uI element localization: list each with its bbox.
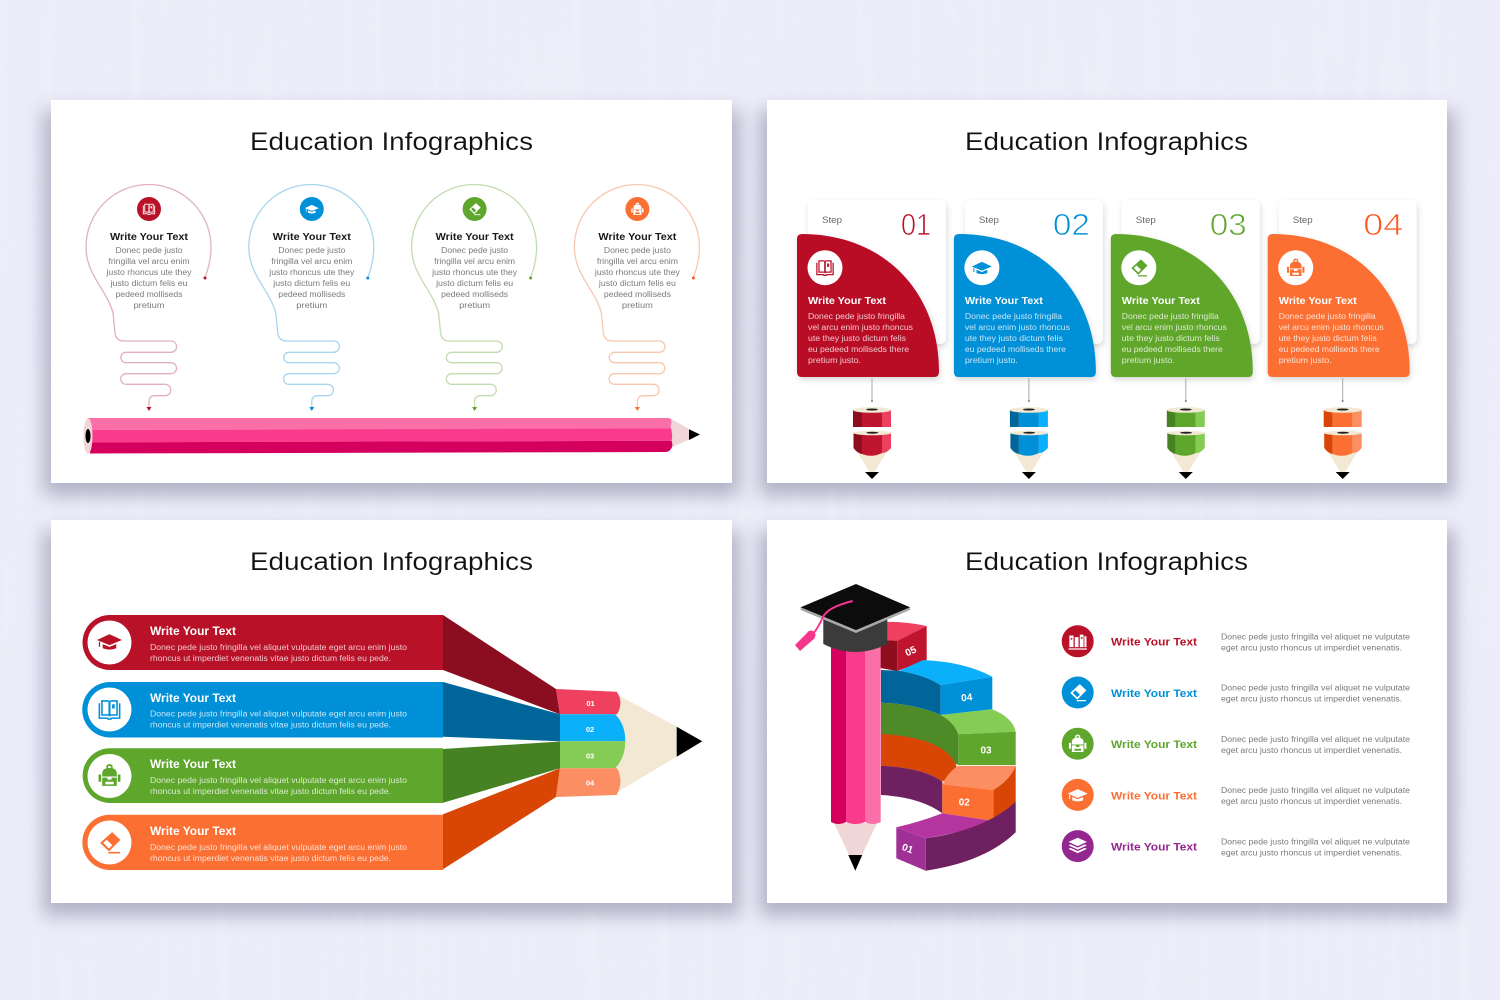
step card 03 [1111, 200, 1260, 377]
step 02: 02 [959, 798, 970, 808]
step card 01: Step [822, 215, 842, 226]
bar 3 green: Write Your Text [150, 759, 236, 771]
pencil tip with numbered segments: 04 [586, 778, 595, 787]
list item 5: Donec pede justo fringilla vel aliquet ne vulputate [1221, 837, 1411, 846]
list item 1 [1062, 625, 1411, 657]
panel: pencil bars slide [43, 520, 740, 916]
bulb 2 blue: Donec pede justo [278, 246, 346, 255]
list item 3 [1062, 728, 1411, 760]
pencil tip with numbered segments [556, 689, 702, 797]
list item 5: eget arcu justo rhoncus ut imperdiet venenatis. [1221, 848, 1402, 857]
bulb 4 orange: justo rhoncus ute they [594, 268, 680, 277]
bulb 3 green: fringilla vel arcu enim [434, 257, 515, 266]
list item 3: Donec pede justo fringilla vel aliquet ne vulputate [1221, 735, 1411, 744]
bar 4 orange: rhoncus ut imperdiet venenatis vitae justo dictum felis eu pede. [150, 854, 391, 863]
bulb 3 green: justo rhoncus ute they [431, 268, 517, 277]
bulb 4 orange [574, 185, 699, 411]
bar 1 red: Write Your Text [150, 626, 236, 638]
long pink pencil [84, 418, 700, 454]
panel: isometric steps slide [759, 520, 1455, 916]
bar 2 blue: rhoncus ut imperdiet venenatis vitae justo dictum felis eu pede. [150, 720, 391, 730]
list item 3: Write Your Text [1111, 739, 1197, 751]
purple back band [881, 766, 942, 813]
list item 4: Donec pede justo fringilla vel aliquet ne vulputate [1221, 786, 1411, 795]
step card 04 [1268, 200, 1417, 377]
bulb 2 blue: justo rhoncus ute they [268, 268, 354, 277]
panel: lightbulb pencil slide [43, 100, 740, 496]
list item 2: Write Your Text [1111, 688, 1197, 700]
bulb 1 red: pedeed molliseds [116, 290, 182, 299]
bulb 2 blue: pretium [296, 301, 328, 310]
bar 2 blue: Donec pede justo fringilla vel aliquet vulputate eget arcu enim justo [150, 710, 408, 718]
bulb 1 red: Write Your Text [110, 231, 189, 243]
bar 4 orange: Donec pede justo fringilla vel aliquet vulputate eget arcu enim justo [150, 843, 408, 852]
small pencil blue [1010, 378, 1048, 479]
step 03: 03 [980, 746, 992, 756]
step card 04: Donec pede justo fringilla [1279, 312, 1376, 321]
bulb 2 blue: Write Your Text [273, 231, 351, 243]
bulb 1 red: justo rhoncus ute they [105, 268, 192, 277]
bulb 4 orange: pedeed molliseds [604, 290, 671, 299]
step card 01: ute they justo dictum felis [808, 334, 906, 343]
step 05: 05 [904, 644, 919, 659]
step card 03: ute they justo dictum felis [1122, 334, 1220, 343]
step card 03: vel arcu enim justo rhoncus [1122, 323, 1227, 332]
step card 03: Step [1136, 215, 1156, 226]
list item 4: eget arcu justo rhoncus ut imperdiet venenatis. [1221, 797, 1402, 806]
bulb 3 green: Donec pede justo [441, 246, 509, 255]
step card 04: pretium justo. [1279, 356, 1332, 365]
list item 4: Write Your Text [1111, 790, 1197, 802]
step card 02: eu pedeed molliseds there [965, 345, 1066, 354]
list item 1: Write Your Text [1111, 637, 1197, 649]
bulb 4 orange: fringilla vel arcu enim [597, 257, 678, 266]
step 05 [880, 622, 927, 671]
bar 1 red: rhoncus ut imperdiet venenatis vitae justo dictum felis eu pede. [150, 654, 391, 663]
bar 2 blue [82, 682, 560, 741]
step card 04: ute they justo dictum felis [1279, 334, 1377, 343]
bar 4 orange: Write Your Text [150, 826, 236, 838]
bulb 3 green: Write Your Text [436, 231, 514, 243]
list item 2: eget arcu justo rhoncus ut imperdiet venenatis. [1221, 695, 1402, 704]
step card 02 [954, 200, 1103, 377]
step card 01: Write Your Text [808, 295, 887, 307]
small pencil green [1167, 378, 1205, 479]
step 01: 01 [900, 842, 915, 856]
step card 03: eu pedeed molliseds there [1122, 345, 1223, 354]
bulb 3 green: justo dictum felis eu [435, 279, 513, 288]
step card 04: Write Your Text [1279, 295, 1357, 307]
bulb 4 orange: justo dictum felis eu [598, 279, 676, 288]
step 04: 04 [961, 692, 973, 704]
bulb 1 red: Donec pede justo [116, 246, 183, 255]
list item 1: eget arcu justo rhoncus ut imperdiet venenatis. [1221, 644, 1402, 652]
step card 02: Donec pede justo fringilla [965, 312, 1062, 321]
step card 02: ute they justo dictum felis [965, 334, 1063, 343]
bulb 3 green: pretium [459, 301, 490, 310]
bar 2 blue: Write Your Text [150, 693, 236, 705]
bar 4 orange [82, 768, 560, 870]
bulb 2 blue: pedeed molliseds [278, 290, 345, 299]
bulb 3 green [412, 185, 537, 411]
step card 02: Write Your Text [965, 295, 1043, 307]
step card 02: Step [979, 215, 999, 226]
list item 3: eget arcu justo rhoncus ut imperdiet venenatis. [1221, 746, 1402, 755]
bulb 4 orange: pretium [622, 301, 653, 310]
step card 04: vel arcu enim justo rhoncus [1279, 323, 1384, 332]
step card 02: 02 [1053, 207, 1090, 242]
bar 1 red [82, 615, 560, 714]
step 03 [881, 703, 1016, 765]
bulb 1 red: justo dictum felis eu [109, 279, 188, 288]
step card 02: pretium justo. [965, 356, 1018, 365]
tall pencil with graduation cap [795, 584, 910, 871]
bar 3 green: Donec pede justo fringilla vel aliquet vulputate eget arcu enim justo [150, 776, 408, 785]
step card 01 [797, 200, 946, 377]
bulb 2 blue [249, 185, 374, 411]
step card 01: pretium justo. [808, 356, 861, 365]
bulb 2 blue: fringilla vel arcu enim [271, 257, 353, 266]
step card 03: Write Your Text [1122, 295, 1200, 307]
bulb 4 orange: Write Your Text [598, 231, 677, 243]
bar 1 red: Donec pede justo fringilla vel aliquet vulputate eget arcu enim justo [150, 643, 408, 652]
step card 02: vel arcu enim justo rhoncus [965, 323, 1070, 332]
step 01 [896, 802, 1016, 871]
list item 2: Donec pede justo fringilla vel aliquet ne vulputate [1221, 684, 1411, 693]
isometric staircase [880, 622, 1016, 871]
step card 04: 04 [1363, 207, 1403, 242]
bulb 1 red: pretium [134, 301, 165, 310]
list item 1: Donec pede justo fringilla vel aliquet ne vulputate [1221, 632, 1411, 642]
pencil tip with numbered segments: 03 [586, 752, 594, 760]
step 02 [942, 766, 1016, 821]
step card 03: pretium justo. [1122, 356, 1175, 365]
pencil tip with numbered segments: 01 [586, 699, 595, 708]
bar 3 green: rhoncus ut imperdiet venenatis vitae justo dictum felis eu pede. [150, 787, 391, 796]
small pencil red [853, 378, 891, 479]
panel: step cards slide [759, 100, 1455, 496]
bar 3 green [83, 742, 560, 803]
step card 01: eu pedeed molliseds there [808, 345, 910, 354]
title: slide 3: Education Infographics [250, 548, 533, 576]
step card 03: 03 [1210, 207, 1247, 242]
orange back band [881, 734, 957, 782]
step 04 [881, 660, 992, 715]
small pencil orange [1324, 378, 1362, 479]
step card 01: 01 [901, 207, 931, 242]
step card 03: Donec pede justo fringilla [1122, 312, 1219, 321]
title: slide 2: Education Infographics [965, 128, 1248, 156]
list item 5 [1062, 830, 1411, 862]
bulb 1 red [86, 185, 211, 411]
step card 04: Step [1293, 215, 1313, 226]
bulb 1 red: fringilla vel arcu enim [108, 257, 190, 266]
title: slide 1: Education Infographics [250, 128, 533, 156]
title: slide 4: Education Infographics [965, 548, 1248, 576]
bulb 3 green: pedeed molliseds [441, 290, 508, 299]
list item 5: Write Your Text [1111, 842, 1197, 854]
step card 01: vel arcu enim justo rhoncus [808, 323, 913, 332]
bulb 2 blue: justo dictum felis eu [272, 279, 350, 288]
step card 04: eu pedeed molliseds there [1279, 345, 1380, 354]
pencil tip with numbered segments: 02 [586, 725, 594, 734]
list item 4 [1062, 779, 1411, 811]
bulb 4 orange: Donec pede justo [604, 246, 671, 255]
list item 2 [1062, 676, 1411, 708]
step card 01: Donec pede justo fringilla [808, 312, 906, 321]
